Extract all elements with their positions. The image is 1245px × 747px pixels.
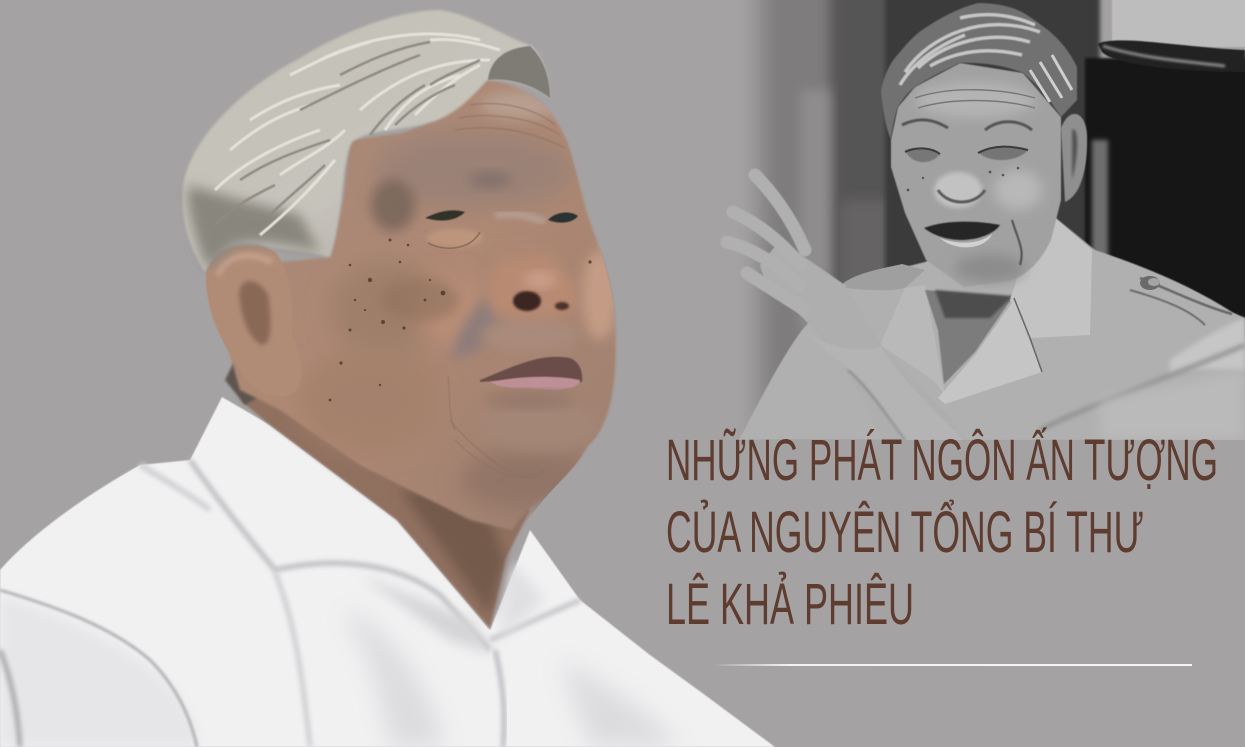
photo: black and white portrait <box>720 0 1245 440</box>
hair <box>182 10 550 272</box>
title <box>666 428 1218 637</box>
neck <box>225 360 530 628</box>
divider rule <box>712 664 1192 666</box>
nose <box>489 254 578 318</box>
head <box>881 3 1087 287</box>
shirt <box>739 205 1245 440</box>
ear <box>206 245 302 396</box>
arm and hand <box>727 175 972 445</box>
white shirt <box>0 397 775 747</box>
photo: foreground portrait <box>0 10 775 747</box>
title line 3: LÊ KHẢ PHIÊU <box>666 572 914 637</box>
face <box>206 80 618 530</box>
skin spots <box>329 238 592 401</box>
mouth <box>480 357 582 408</box>
eye brow and eyes <box>425 210 578 248</box>
photo backdrop <box>750 0 1245 440</box>
